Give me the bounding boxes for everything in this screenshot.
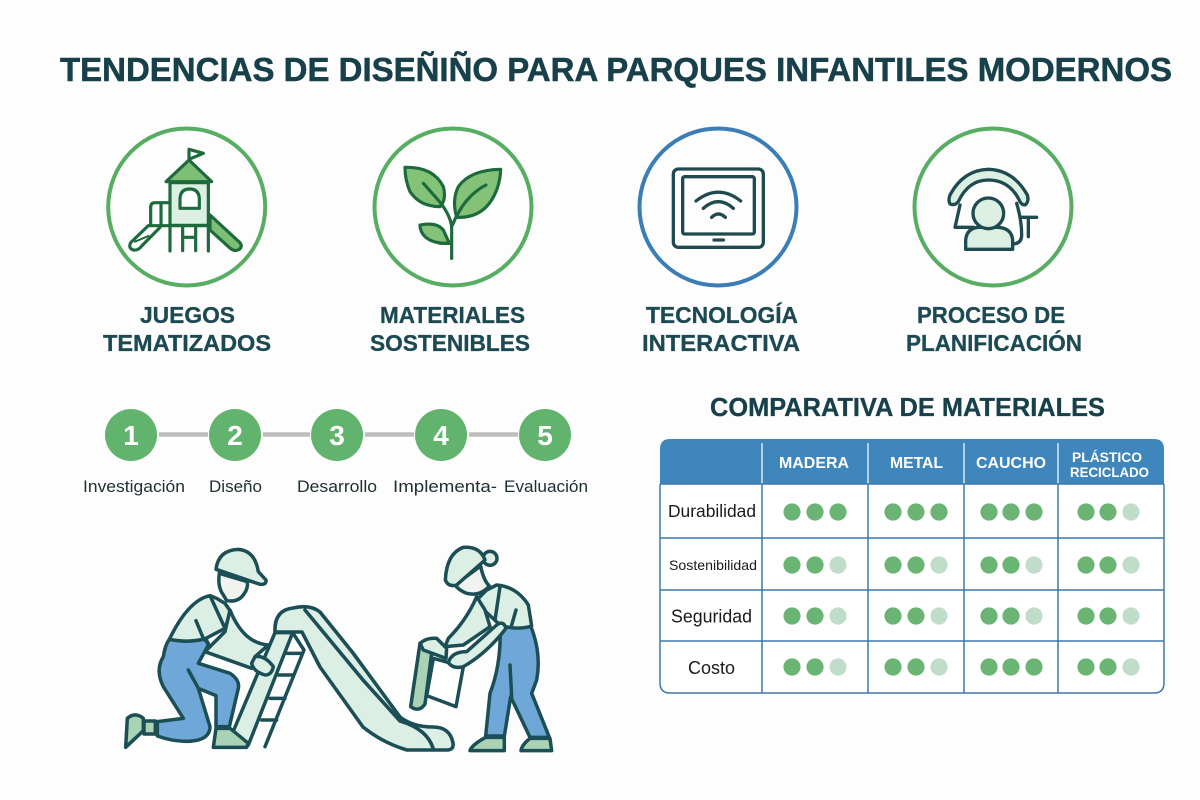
- panel: materiales sostenibles: [370, 128, 532, 356]
- row: seguridad: [671, 606, 1140, 626]
- illustration: workers building a slide: [126, 547, 552, 751]
- title: TENDENCIAS DE DISEÑIÑO PARA PARQUES INFANTILES MODERNOS: [60, 51, 1172, 88]
- label: juegos tematizados: TEMATIZADOS: [103, 330, 271, 356]
- table header: MADERA: [779, 455, 849, 472]
- step 4: [393, 409, 497, 496]
- step 5: Evaluación: [504, 477, 588, 496]
- row: durabilidad: [668, 501, 1140, 521]
- panel: juegos tematizados: [103, 128, 271, 356]
- label: materiales sostenibles: SOSTENIBLES: [370, 330, 530, 356]
- panel: proceso de planificación: [906, 128, 1082, 356]
- ladder: [232, 633, 304, 747]
- label: proceso de planificación: PROCESO DE: [917, 302, 1065, 328]
- row: costo: [688, 658, 1140, 678]
- step 5: 5: [537, 420, 553, 451]
- table header: PLÁSTICO: [1072, 450, 1142, 465]
- row: durabilidad: Durabilidad: [668, 501, 756, 521]
- label: materiales sostenibles: MATERIALES: [380, 302, 525, 328]
- label: juegos tematizados: JUEGOS: [140, 302, 235, 328]
- worker kneeling: [126, 549, 273, 747]
- table grid: [660, 484, 1164, 693]
- step 2: Diseño: [209, 477, 262, 496]
- step 3: [297, 409, 377, 496]
- step 1: [83, 409, 185, 496]
- panel: tecnología interactiva: [640, 128, 800, 356]
- step 3: 3: [329, 420, 345, 451]
- row: costo: Costo: [688, 658, 735, 678]
- heading: comparativa de materiales: COMPARATIVA DE MATERIALES: [710, 392, 1105, 422]
- row: sostenibilidad: Sostenibilidad: [669, 557, 757, 573]
- step 4: Implementa-: [393, 477, 497, 496]
- label: tecnología interactiva: [642, 301, 800, 356]
- icon: planner with headset arc: [914, 128, 1072, 286]
- label: proceso de planificación: PLANIFICACIÓN: [906, 329, 1082, 356]
- table header: [660, 439, 1164, 484]
- step 2: 2: [227, 420, 243, 451]
- worker standing: [411, 547, 552, 751]
- step 3: Desarrollo: [297, 477, 377, 496]
- step 1: Investigación: [83, 477, 185, 496]
- table header: CAUCHO: [976, 455, 1046, 472]
- icon: tablet with wifi: [640, 128, 796, 286]
- label: juegos tematizados: [103, 302, 271, 356]
- label: materiales sostenibles: [370, 302, 530, 356]
- table: material comparison: [660, 439, 1164, 693]
- table header: RECICLADO: [1070, 465, 1149, 480]
- label: proceso de planificación: [906, 302, 1082, 356]
- process timeline: [83, 409, 588, 496]
- icon: leaves: [374, 128, 532, 286]
- icon: playground tower: [108, 128, 265, 286]
- row: seguridad: Seguridad: [671, 606, 752, 626]
- row: sostenibilidad: [669, 556, 1140, 574]
- step 1: 1: [123, 420, 139, 451]
- label: tecnología interactiva: INTERACTIVA: [642, 330, 800, 356]
- label: tecnología interactiva: TECNOLOGÍA: [646, 301, 798, 328]
- step 5: [504, 409, 588, 496]
- slide: [275, 607, 453, 750]
- step 2: [209, 409, 262, 496]
- table header: METAL: [890, 455, 943, 472]
- step 4: 4: [433, 420, 449, 451]
